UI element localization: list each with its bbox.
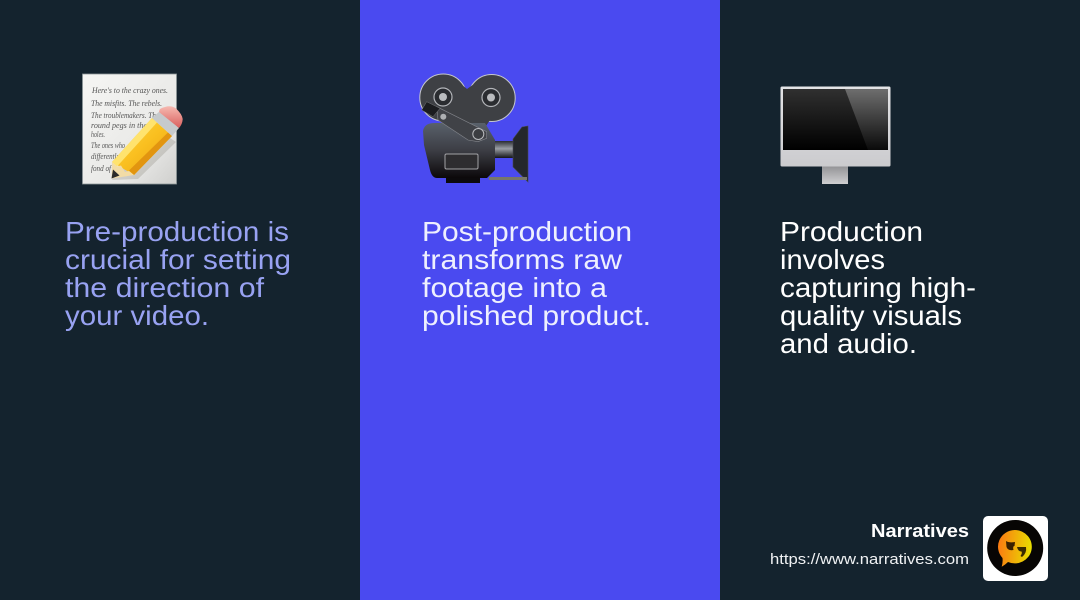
text block: post-production: Post-production	[422, 216, 632, 247]
icon: memo and pencil: round pegs in the	[91, 121, 147, 130]
text block: pre-production	[65, 216, 291, 331]
text block: production: involves	[780, 244, 885, 275]
text block: production: and audio.	[780, 328, 917, 359]
text block: production: Production	[780, 216, 923, 247]
icon: desktop monitor	[780, 86, 890, 184]
text block: production: capturing high-	[780, 272, 976, 303]
text block: pre-production: the direction of	[65, 272, 264, 303]
text block: pre-production: Pre-production is	[65, 216, 289, 247]
icon part: pencil	[112, 106, 183, 180]
text block: post-production	[422, 216, 651, 331]
icon: memo and pencil: fond of	[91, 164, 113, 173]
panel: post-production	[360, 0, 720, 600]
logo	[983, 516, 1048, 581]
text block: post-production: polished product.	[422, 300, 651, 331]
icon: movie camera	[420, 74, 528, 183]
icon: memo and pencil: differently.	[91, 152, 121, 161]
icon: memo and pencil: The troublemakers. The	[91, 111, 159, 120]
text block: post-production: footage into a	[422, 272, 607, 303]
icon: memo and pencil: holes.	[91, 130, 105, 139]
panel: production	[720, 0, 1080, 600]
icon: memo and pencil: The ones who	[91, 141, 125, 150]
text block: pre-production: crucial for setting	[65, 244, 291, 275]
text block: pre-production: your video.	[65, 300, 209, 331]
icon: memo and pencil: The misfits. The rebels.	[91, 99, 162, 108]
text block: production: quality visuals	[780, 300, 962, 331]
brand url: https://www.narratives.com	[770, 551, 969, 568]
icon: memo and pencil	[82, 74, 183, 184]
panel: pre-production	[0, 0, 360, 600]
icon: memo and pencil: Here's to the crazy ones.	[91, 86, 168, 95]
brand name: Narratives	[871, 521, 969, 541]
text block: post-production: transforms raw	[422, 244, 623, 275]
text block: production	[780, 216, 976, 359]
